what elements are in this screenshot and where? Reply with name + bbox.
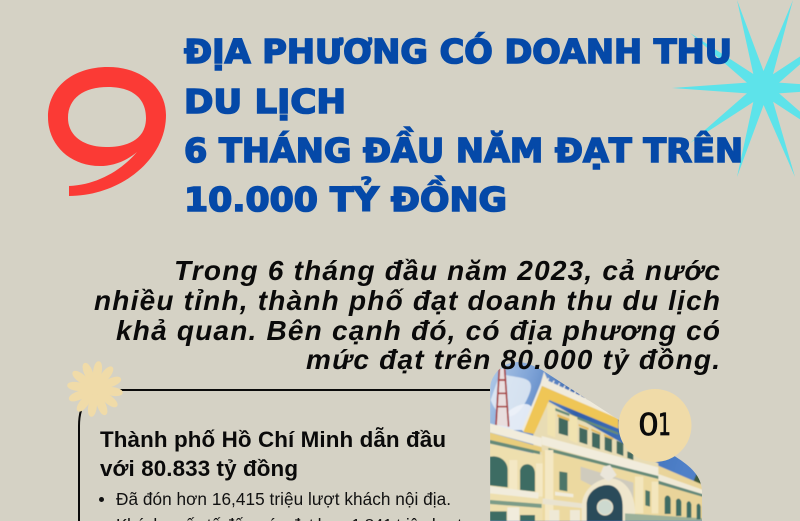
intro paragraph: Trong 6 tháng đầu năm 2023, cả nước — [174, 255, 720, 286]
intro paragraph: nhiều tỉnh, thành phố đạt doanh thu du lịch — [94, 285, 720, 316]
panel heading: Thành phố Hồ Chí Minh dẫn đầu — [100, 427, 446, 452]
title: 6 THÁNG ĐẦU NĂM ĐẠT TRÊN — [184, 126, 743, 170]
title: ĐỊA PHƯƠNG CÓ DOANH THU — [184, 31, 732, 71]
panel heading — [100, 427, 446, 481]
icon: cyan starburst — [672, 0, 800, 177]
number badge 01 — [618, 389, 692, 462]
intro paragraph — [94, 255, 720, 375]
panel heading: với 80.833 tỷ đồng — [100, 456, 298, 481]
intro paragraph: khả quan. Bên cạnh đó, có địa phương có — [116, 315, 720, 346]
number badge 01: 1 — [658, 408, 671, 443]
bullet list — [99, 489, 462, 521]
icon: cream flower — [67, 361, 123, 417]
photo: Saigon Central Post Office — [490, 360, 707, 521]
number badge 01: 0 — [638, 408, 659, 443]
title: 10.000 TỶ ĐỒNG — [184, 175, 507, 219]
big red number nine — [48, 67, 166, 196]
bullet list: Đã đón hơn 16,415 triệu lượt khách nội địa. — [116, 489, 451, 509]
title — [184, 31, 743, 219]
panel outline — [79, 390, 490, 521]
title: DU LỊCH — [184, 82, 346, 121]
intro paragraph: mức đạt trên 80.000 tỷ đồng. — [306, 344, 720, 375]
